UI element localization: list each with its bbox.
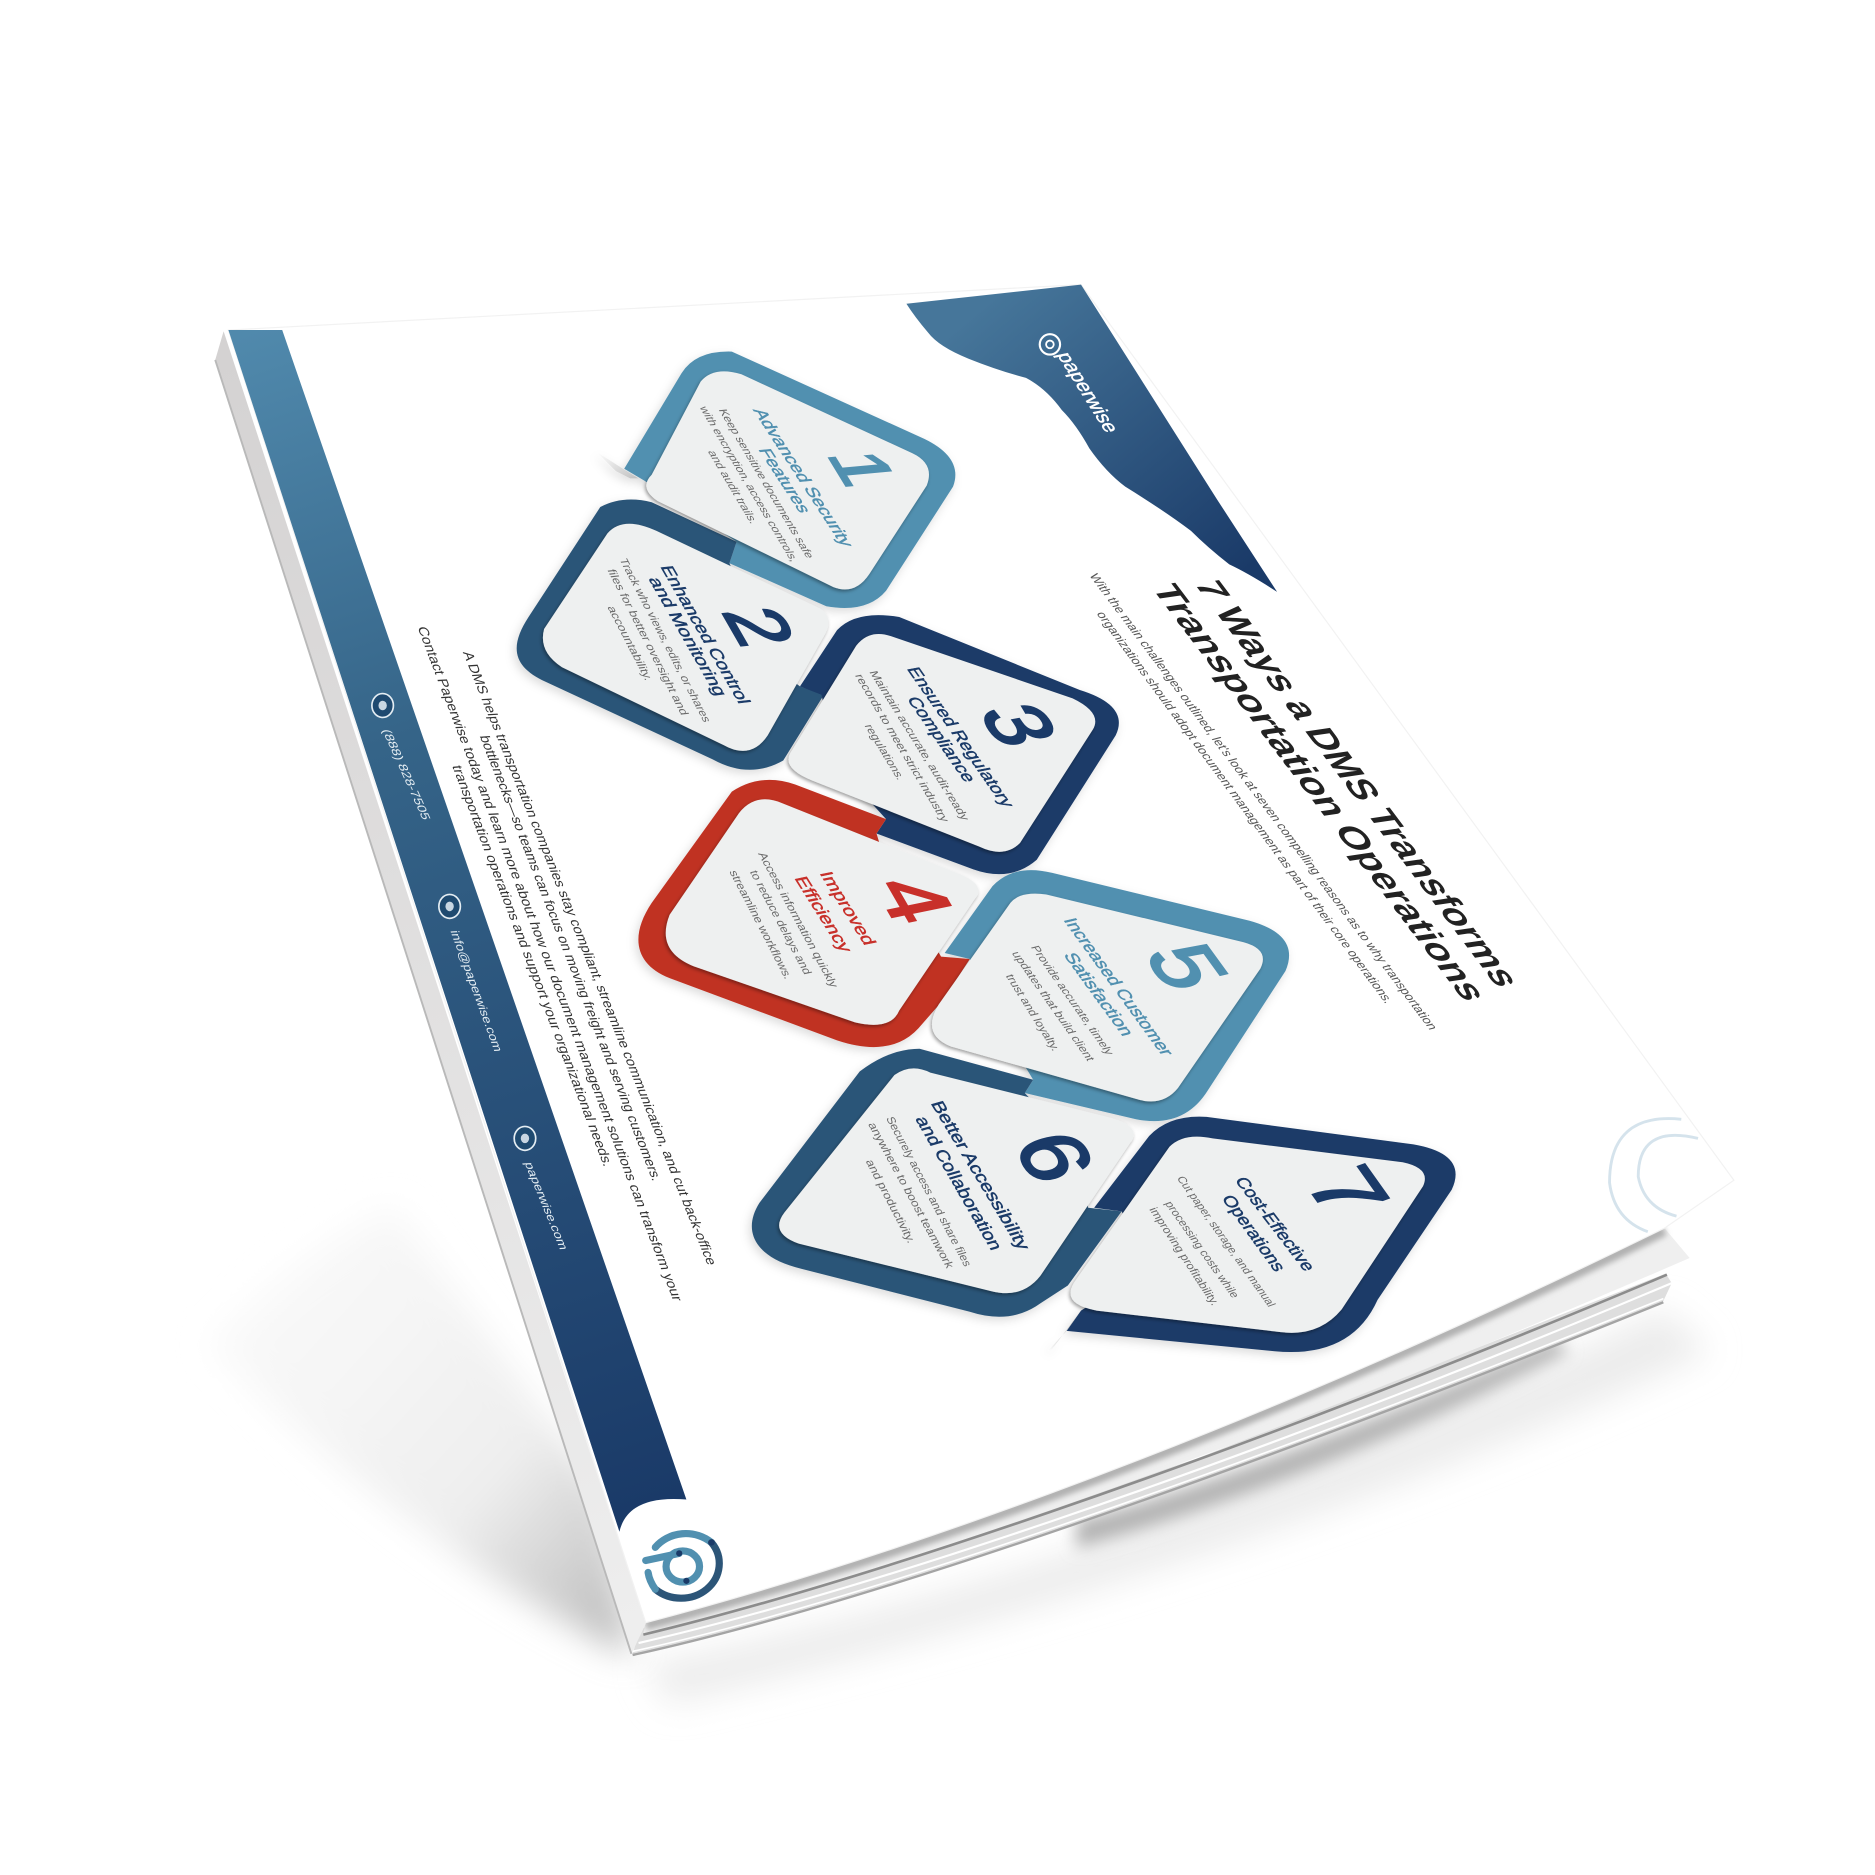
body text: records to meet strict industry — [852, 673, 951, 823]
body text: accountability. — [604, 606, 655, 681]
contact: phone — [372, 694, 434, 821]
body text: streamline workflows. — [726, 870, 794, 980]
heading: Improved Efficiency — [790, 870, 881, 954]
tail shadow: card 1 — [597, 452, 639, 478]
heading: Better Accessibility and Collaboration: and Collaboration — [911, 1114, 1007, 1252]
body text: Maintain accurate, audit-ready — [866, 670, 971, 821]
body text: to reduce delays and — [747, 870, 813, 976]
number 5: 5 — [1124, 935, 1249, 998]
panel: card 5 — [932, 894, 1263, 1101]
body text — [852, 670, 971, 823]
book page stack — [633, 1228, 1690, 1655]
body text: updates that build client — [1008, 951, 1097, 1063]
heading: Better Accessibility and Collaboration: Better Accessibility — [927, 1099, 1035, 1252]
body text: anywhere to boost teamwork — [865, 1121, 956, 1270]
heading: Enhanced Control and Monitoring — [644, 565, 755, 705]
body text — [1002, 945, 1116, 1063]
heading: Ensured Regulatory Compliance: Ensured Regulatory — [903, 665, 1019, 809]
contact: phone: (888) 828-7505 — [379, 729, 434, 821]
body text: Securely access and share files — [883, 1115, 973, 1268]
frame: card 7 — [1067, 1117, 1456, 1352]
body text: and audit trails. — [705, 450, 760, 524]
body text: Track who views, edits, or shares — [616, 558, 713, 723]
heading: Advanced Security Features: Advanced Security — [749, 408, 858, 547]
front page — [228, 285, 1734, 1623]
body text: with encryption, access controls, — [696, 405, 800, 562]
body text — [726, 852, 840, 989]
frame: card 3 — [800, 615, 1119, 874]
heading: Enhanced Control and Monitoring: Enhanced Control — [656, 565, 755, 705]
contact: email: info@paperwise.com — [447, 930, 506, 1052]
panel: card 7 — [1070, 1137, 1425, 1333]
corner decoration arcs — [1610, 1119, 1698, 1232]
body text: processing costs while — [1162, 1200, 1241, 1300]
subtitle: organizations should adopt document management as part of their core operations. — [1093, 611, 1396, 1005]
frame: card 4 — [638, 780, 970, 1047]
panel: card 3 — [788, 634, 1095, 852]
body text: Provide accurate, timely — [1028, 945, 1116, 1056]
heading: Increased Customer Satisfaction: Satisfaction — [1059, 951, 1139, 1038]
contact: email — [439, 894, 506, 1052]
contact: web: paperwise.com — [521, 1162, 571, 1250]
number 6: 6 — [994, 1121, 1116, 1192]
body text: improving profitability. — [1146, 1206, 1221, 1307]
heading: Ensured Regulatory Compliance: Compliance — [903, 695, 981, 783]
body text: regulations. — [861, 724, 907, 781]
title: 7 Ways a DMS Transforms — [1185, 578, 1529, 989]
heading: Cost-Effective Operations: Operations — [1218, 1192, 1291, 1274]
book spine — [215, 331, 646, 1654]
frame: card 6 — [752, 1049, 1122, 1317]
heading: Advanced Security Features: Features — [754, 448, 816, 514]
closing text block: A DMS helps transportation companies stay compliant, streamline communication, and cut back-office — [460, 651, 720, 1266]
number 4: 4 — [855, 869, 973, 930]
footer band — [228, 330, 686, 1532]
frame: card 1 — [624, 352, 955, 608]
panel: card 6 — [779, 1068, 1134, 1293]
heading: Improved Efficiency: Improved — [815, 870, 881, 947]
closing text block: Contact Paperwise today and learn more about how our document management solutions can transform your — [414, 626, 685, 1302]
header wave shape — [906, 285, 1277, 592]
subtitle: With the main challenges outlined, let's look at seven compelling reasons as to why transportation — [1086, 572, 1441, 1031]
body text: trust and loyalty. — [1002, 973, 1062, 1052]
heading: Increased Customer Satisfaction: Increased Customer — [1059, 916, 1178, 1057]
body text: Cut paper, storage, and manual — [1174, 1175, 1277, 1308]
number 7: 7 — [1286, 1154, 1409, 1229]
logo: paperwise mark — [646, 1534, 719, 1598]
logo: paperwise wordmark: paperwise — [1052, 351, 1123, 434]
number 2: 2 — [704, 603, 813, 651]
body text: Access information quickly — [755, 852, 840, 989]
contact: web — [514, 1126, 571, 1250]
number 3: 3 — [960, 697, 1079, 753]
heading: Better Accessibility and Collaboration — [911, 1099, 1035, 1252]
tail shadow: card 7 — [1048, 1311, 1081, 1351]
title: Transportation Operations — [1142, 581, 1496, 1003]
shadow: left ground shadow — [209, 1208, 631, 1656]
heading: Enhanced Control and Monitoring: and Monitoring — [644, 576, 732, 697]
heading: Improved Efficiency: Efficiency — [790, 875, 857, 954]
heading: Cost-Effective Operations: Cost-Effective — [1231, 1174, 1320, 1273]
ribbon frames — [517, 352, 1456, 1352]
panel: card 4 — [666, 799, 978, 1025]
frame: card 5 — [945, 870, 1289, 1121]
closing text block: bottlenecks—so teams can focus on moving freight and serving customers. — [477, 735, 665, 1182]
body text: and productivity. — [863, 1159, 917, 1245]
number 1: 1 — [811, 447, 915, 490]
closing text block: transportation operations and support your organizational needs. — [449, 765, 616, 1167]
frame: card 2 — [517, 500, 824, 770]
body text: files for better oversight and — [604, 569, 690, 716]
body text: Keep sensitive documents safe — [715, 409, 816, 559]
panel: card 1 — [646, 371, 929, 589]
panel: card 2 — [543, 524, 829, 751]
shadow: bottom ground shadow — [646, 1309, 1710, 1704]
